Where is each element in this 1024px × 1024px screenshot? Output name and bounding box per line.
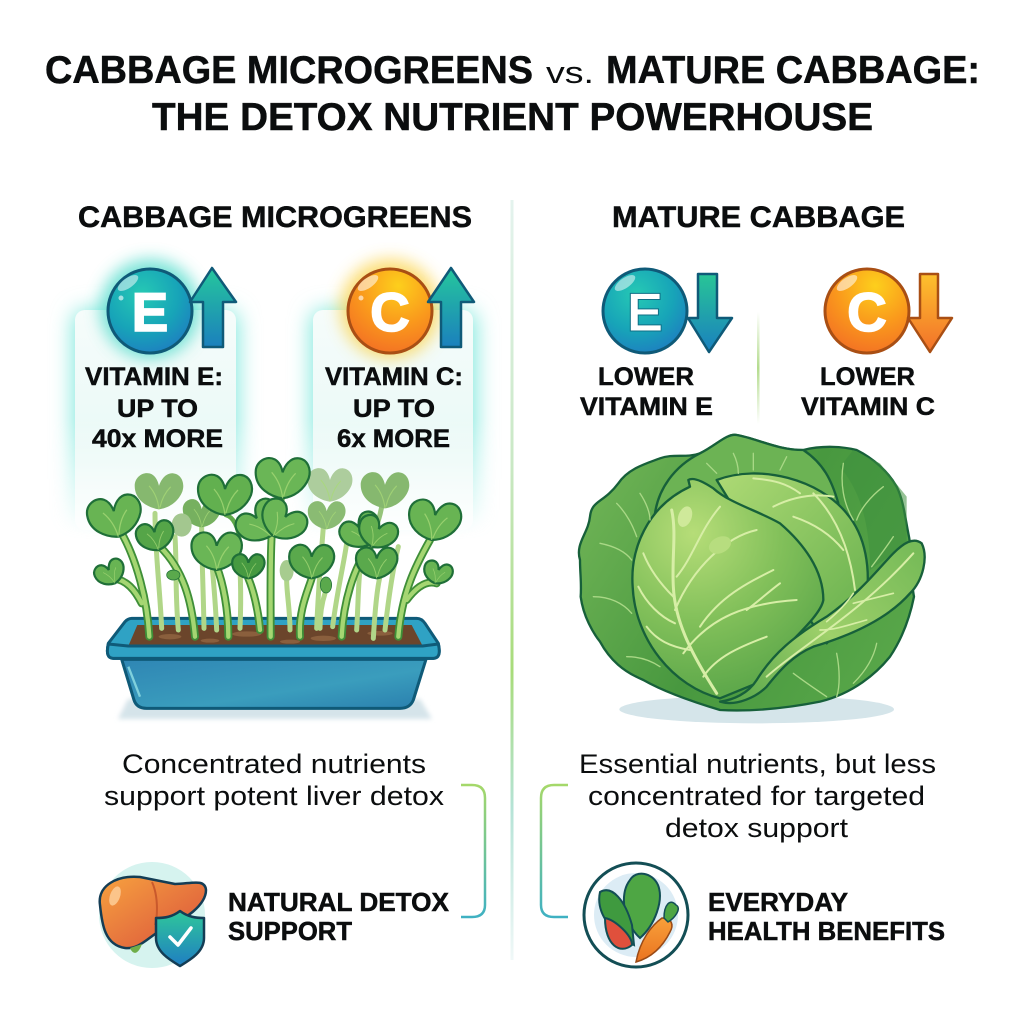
cabbage head [717,473,868,643]
center divider [510,200,514,960]
icon: vitamin C ball: C [847,281,887,343]
text: lower vitamin C: LOWER [820,363,915,391]
text: vitamin E amount: VITAMIN E: [85,363,223,391]
panel: vitamin C mature [801,269,952,421]
text: vitamin E amount: UP TO [117,395,198,423]
text: microgreens description: Concentrated nutrients [122,749,426,779]
panel: vitamin C microgreens [311,259,476,530]
icon: down arrow [688,274,732,352]
text: microgreens description [104,749,445,811]
heading: cabbage microgreens: CABBAGE MICROGREENS [78,201,472,234]
text: natural detox support: NATURAL DETOX [228,887,450,917]
title: vs. [546,55,594,90]
icon: vitamin C ball [348,269,432,353]
front wrap leaf [720,541,925,703]
title: MATURE CABBAGE: [606,49,980,92]
illustration: mature cabbage [579,435,925,723]
tray body [107,644,439,708]
text: microgreens description: support potent liver detox [104,781,445,811]
icon: vitamin C ball: C [370,281,410,343]
icon: plate of vegetables [584,863,688,967]
text: mature description: concentrated for targeted [588,781,925,811]
text: lower vitamin E: VITAMIN E [580,393,713,421]
front sprouts [85,458,463,637]
title [45,49,980,139]
bracket: right [541,785,568,917]
icon: up arrow [190,268,236,347]
text: lower vitamin E [580,363,713,421]
icon: vitamin C ball [825,269,909,353]
outer leaves [579,435,914,710]
text: vitamin C amount: 6x MORE [337,425,450,453]
icon: vitamin E ball [108,269,192,353]
text: mature description [579,749,936,843]
panel: vitamin E mature [580,269,732,421]
title: CABBAGE MICROGREENS [45,49,533,92]
text: lower vitamin C [801,363,935,421]
icon: vitamin E ball: E [132,281,168,343]
text: vitamin E amount: 40x MORE [92,425,223,453]
icon: vitamin E ball [603,269,687,353]
text: everyday health benefits [708,887,945,946]
text: lower vitamin C: VITAMIN C [801,393,935,421]
text: vitamin C amount [325,363,463,453]
panel: vitamin E microgreens [73,259,238,530]
text: mature description: Essential nutrients, but less [579,749,936,779]
illustration: microgreens tray [85,458,463,719]
text: everyday health benefits: EVERYDAY [708,887,848,917]
text: mature description: detox support [665,813,849,843]
icon: liver with shield [99,862,206,968]
back sprouts [135,468,409,638]
bracket: left [461,785,485,917]
text: natural detox support: SUPPORT [228,916,352,946]
text: vitamin C amount: VITAMIN C: [325,363,463,391]
text: lower vitamin E: LOWER [598,363,694,391]
text: everyday health benefits: HEALTH BENEFITS [708,916,945,946]
text: vitamin C amount: UP TO [353,395,435,423]
icon: down arrow [908,274,952,352]
tray back and soil [107,618,439,658]
title: THE DETOX NUTRIENT POWERHOUSE [152,96,873,139]
heading: mature cabbage: MATURE CABBAGE [612,201,905,234]
icon: up arrow [428,268,474,347]
icon: vitamin E ball: E [627,281,663,343]
text: vitamin E amount [85,363,223,453]
text: natural detox support [228,887,450,946]
